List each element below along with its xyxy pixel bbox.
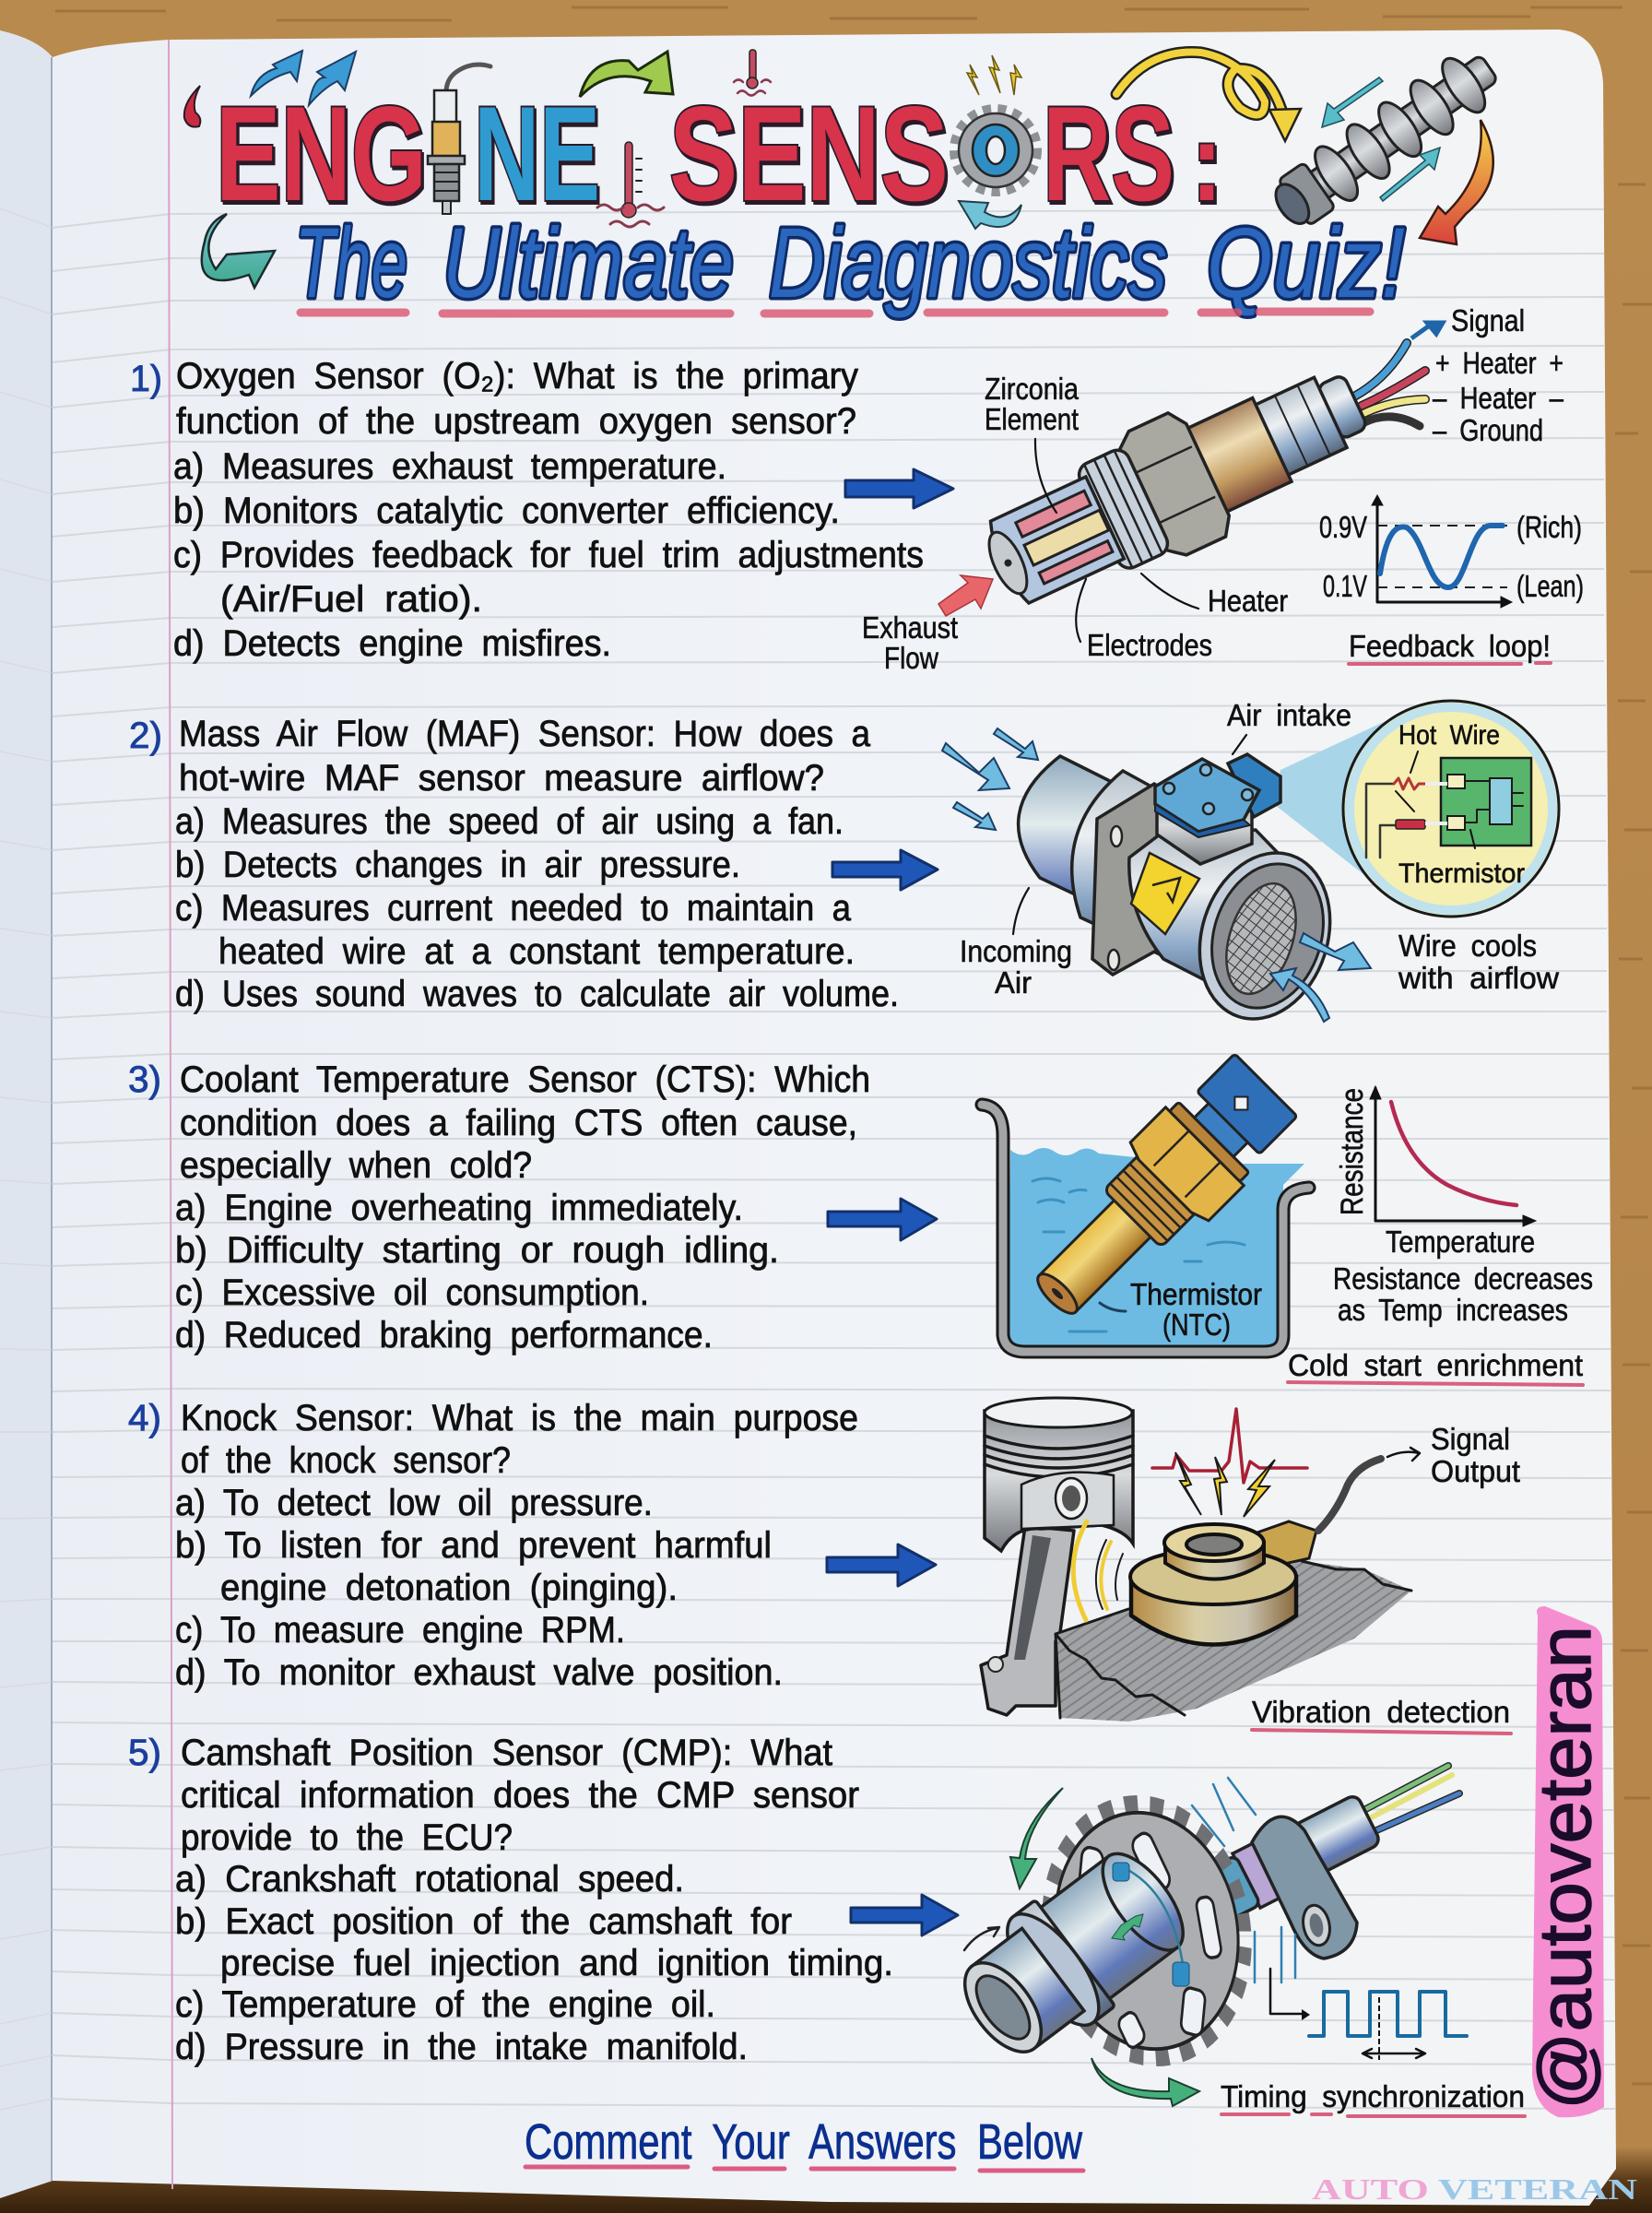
subtitle: Diagnostics: [769, 207, 1167, 318]
diagram: oxygen sensor: [862, 303, 1584, 675]
question 2: [129, 714, 938, 1014]
question 1 text: function of the upstream oxygen sensor?: [176, 401, 856, 442]
labels: Air: [995, 965, 1032, 1000]
sensor body: [967, 339, 1385, 631]
arrow: [851, 1895, 958, 1935]
margin line: [169, 40, 172, 2189]
leader lines: [1035, 439, 1198, 642]
thermistor pointer: [1100, 1303, 1126, 1311]
arrow: [828, 1199, 937, 1240]
knock waveform: [1152, 1409, 1307, 1483]
question 2 text: hot-wire MAF sensor measure airflow?: [179, 758, 824, 799]
word: SENSORS: RS: [1043, 78, 1174, 229]
question 1 text: c) Provides feedback for fuel trim adjustments: [173, 535, 924, 575]
signal arrow: [1387, 1448, 1420, 1461]
question 4 text: Knock Sensor: What is the main purpose: [181, 1398, 858, 1438]
shaft: [941, 1833, 1203, 2077]
labels: Incoming: [960, 934, 1072, 968]
labels: with airflow: [1398, 961, 1559, 995]
voltage chart: 0.1V: [1323, 569, 1367, 603]
labels: – Heater –: [1433, 381, 1564, 415]
handle tag: @autoveteran: @autoveteran: [1524, 1626, 1606, 2110]
question 2 text: d) Uses sound waves to calculate air volume.: [175, 974, 899, 1014]
wires: [1355, 1766, 1459, 1835]
inset: hot wire circuit: Thermistor: [1398, 858, 1525, 889]
coolant water: [1009, 1148, 1304, 1346]
inset: hot wire circuit: Hot Wire: [1398, 720, 1500, 751]
diagram: coolant temperature sensor: [982, 1046, 1593, 1385]
question 2 text: c) Measures current needed to maintain a: [175, 888, 852, 929]
subtitle underlines: [301, 312, 1370, 314]
subtitle: Quiz!: [1207, 207, 1405, 318]
labels: – Ground: [1433, 413, 1543, 447]
sensor: [1203, 1792, 1383, 1923]
question 3 text: especially when cold?: [180, 1145, 532, 1186]
labels: Output: [1431, 1454, 1520, 1488]
question 1 text: (Air/Fuel ratio).: [220, 579, 482, 620]
airflow arrows: [942, 728, 1371, 1022]
resistance curve chart: Temperature: [1386, 1225, 1535, 1259]
subtitle: Ultimate: [442, 207, 734, 318]
caption: vibration detection: Vibration detection: [1252, 1695, 1510, 1729]
labels: Thermistor: [1130, 1277, 1262, 1311]
labels: Wire cools: [1398, 929, 1537, 963]
vibration arcs: [1073, 1521, 1123, 1620]
engine block: [1056, 1561, 1411, 1722]
voltage chart: (Rich): [1516, 510, 1582, 544]
resistance curve chart: [1335, 1086, 1536, 1259]
caption: cold start enrichment: Cold start enrichment: [1288, 1348, 1583, 1382]
question 5 text: d) Pressure in the intake manifold.: [175, 2027, 748, 2067]
sensor puck: [1130, 1521, 1316, 1645]
watermark: AUTO VETERAN: [1312, 2172, 1637, 2206]
word: ENGINE: ENG: [216, 78, 427, 229]
question 4 text: b) To listen for and prevent harmful: [175, 1525, 772, 1566]
sensor bracket: [1252, 1817, 1357, 1959]
number 4: 4): [128, 1398, 161, 1438]
question 5 text: c) Temperature of the engine oil.: [175, 1984, 715, 2025]
resistance curve chart: Resistance: [1335, 1088, 1370, 1215]
lightning bolts: [1175, 1452, 1275, 1517]
voltage chart: (Lean): [1516, 569, 1584, 603]
question 3 text: a) Engine overheating immediately.: [175, 1188, 743, 1228]
labels: Zirconia: [985, 372, 1080, 406]
caption: timing synchronization: Timing synchronization: [1221, 2079, 1525, 2113]
piston: [985, 1398, 1133, 1551]
labels: Signal: [1431, 1422, 1510, 1456]
labels: Signal: [1451, 303, 1525, 337]
question 3 text: condition does a failing CTS often cause,: [180, 1103, 857, 1143]
labels: Electrodes: [1087, 628, 1212, 662]
subtitle: [202, 207, 1405, 318]
leaders: [1013, 735, 1246, 934]
labels: Heater: [1208, 584, 1288, 618]
call to action: Comment Your Answers Below: [525, 2114, 1083, 2170]
question 5: [128, 1733, 958, 2067]
labels: Element: [985, 402, 1079, 436]
title: Engine Sensors: [184, 41, 1507, 244]
rotation arrows: [1010, 1788, 1199, 2106]
reluctor gear: [1030, 1789, 1264, 2073]
tank: [982, 1105, 1309, 1352]
question 5 text: precise fuel injection and ignition timing.: [220, 1943, 893, 1983]
arrow: [827, 1544, 936, 1586]
wires: [1354, 343, 1425, 426]
water ripples: [1032, 1178, 1245, 1331]
question 1 text: [173, 356, 924, 664]
question 1: [130, 356, 953, 664]
icon: green arrow: [580, 52, 673, 97]
inset: hot wire circuit: [1343, 701, 1559, 917]
labels: [1130, 1261, 1593, 1342]
icon: teal arrows by camshaft: [1322, 77, 1440, 201]
icon: red-yellow curved arrow: [1420, 120, 1493, 244]
caption: feedback loop: Feedback loop!: [1349, 629, 1551, 663]
question 2 text: a) Measures the speed of air using a fan.: [175, 801, 844, 842]
left page edge: [0, 30, 53, 2198]
diagram: camshaft position sensor: [941, 1766, 1525, 2116]
underline: [525, 2167, 1083, 2171]
question 5 text: a) Crankshaft rotational speed.: [175, 1859, 684, 1899]
question 1 text: b) Monitors catalytic converter efficiency.: [173, 491, 840, 531]
diagram: MAF sensor: [942, 698, 1559, 1036]
icon: thermometer in text: [597, 142, 664, 227]
labels: [960, 698, 1559, 1000]
icon: teal arrow under gear: [959, 201, 1021, 229]
sensor: [1011, 1046, 1305, 1340]
voltage chart: 0.9V: [1319, 510, 1367, 544]
labels: Flow: [884, 641, 938, 675]
labels: Air intake: [1227, 698, 1351, 732]
number 1: 1): [130, 359, 162, 399]
question 4 text: of the knock sensor?: [181, 1440, 511, 1481]
question 4 text: a) To detect low oil pressure.: [175, 1483, 653, 1523]
question 2 text: Mass Air Flow (MAF) Sensor: How does a: [179, 714, 871, 754]
question 1 text: a) Measures exhaust temperature.: [173, 446, 726, 487]
question 5 text: [175, 1733, 893, 2067]
labels: [862, 303, 1564, 675]
question 4 text: d) To monitor exhaust valve position.: [175, 1652, 783, 1693]
question 3 text: Coolant Temperature Sensor (CTS): Which: [180, 1059, 870, 1100]
binding line: [51, 57, 53, 2181]
block outline: [1056, 1561, 1411, 1718]
question 3 text: [175, 1059, 870, 1355]
magnifier cone: [1275, 721, 1386, 892]
number 5: 5): [128, 1733, 161, 1773]
magnetic field lines: [1192, 1778, 1295, 1982]
arrow: [832, 850, 938, 890]
opening quote mark: [184, 86, 200, 127]
signal cable: [1318, 1459, 1381, 1531]
subtitle: The: [295, 207, 407, 318]
labels: + Heater +: [1435, 346, 1564, 380]
icon: lightning bolts: [967, 55, 1021, 95]
labels: Resistance decreases: [1333, 1261, 1593, 1296]
word: SENSORS: [669, 78, 1222, 229]
icon: gear as letter O: [955, 110, 1036, 191]
question 2 text: b) Detects changes in air pressure.: [175, 845, 740, 885]
question 2 text: heated wire at a constant temperature.: [218, 931, 855, 972]
icon: small thermometer with waves: [734, 50, 771, 96]
labels: (NTC): [1162, 1308, 1231, 1342]
diagram: knock sensor: [981, 1398, 1520, 1734]
question 4 text: c) To measure engine RPM.: [175, 1610, 625, 1651]
question 3 text: b) Difficulty starting or rough idling.: [175, 1230, 779, 1271]
number 2: 2): [129, 716, 162, 756]
number 3: 3): [128, 1059, 161, 1100]
question 5 text: Camshaft Position Sensor (CMP): What: [181, 1733, 832, 1773]
question 3: [128, 1059, 937, 1355]
exhaust flow arrow: [938, 575, 993, 616]
icon: spark plug as letter I: [428, 65, 490, 214]
pulse signal: [1270, 1969, 1467, 2060]
question 1 text: d) Detects engine misfires.: [173, 623, 611, 664]
question 4 text: [175, 1398, 858, 1693]
word: SENSORS: :: [1191, 101, 1222, 224]
icon: teal curved arrow: [202, 214, 275, 288]
icon: blue air arrows: [251, 51, 356, 105]
question 2 text: [175, 714, 899, 1014]
question 5 text: critical information does the CMP sensor: [181, 1775, 859, 1816]
labels: Exhaust: [862, 610, 958, 645]
question 5 text: b) Exact position of the camshaft for: [175, 1901, 792, 1942]
labels: as Temp increases: [1338, 1293, 1568, 1327]
arrow: [845, 469, 953, 508]
connecting rod: [981, 1526, 1074, 1715]
question 5 text: provide to the ECU?: [181, 1817, 513, 1858]
signal arrow: [1411, 323, 1443, 338]
question 1 text: Oxygen Sensor (O₂): What is the primary: [176, 356, 858, 396]
question 3 text: d) Reduced braking performance.: [175, 1315, 713, 1355]
question 4: [128, 1398, 936, 1693]
MAF body: [1019, 754, 1351, 1036]
question 3 text: c) Excessive oil consumption.: [175, 1272, 649, 1313]
teal markers and green double arrow: [1112, 1863, 1189, 1986]
question 4 text: engine detonation (pinging).: [220, 1568, 678, 1608]
icon: yellow looping arrow: [1116, 53, 1301, 141]
small rotation arrow: [964, 1927, 999, 1950]
icon: camshaft: [1264, 41, 1507, 237]
voltage chart: [1319, 495, 1584, 608]
word: SENSORS: SENS: [669, 78, 949, 229]
labels: [1431, 1422, 1520, 1488]
word: ENGINE: NE: [474, 78, 600, 229]
